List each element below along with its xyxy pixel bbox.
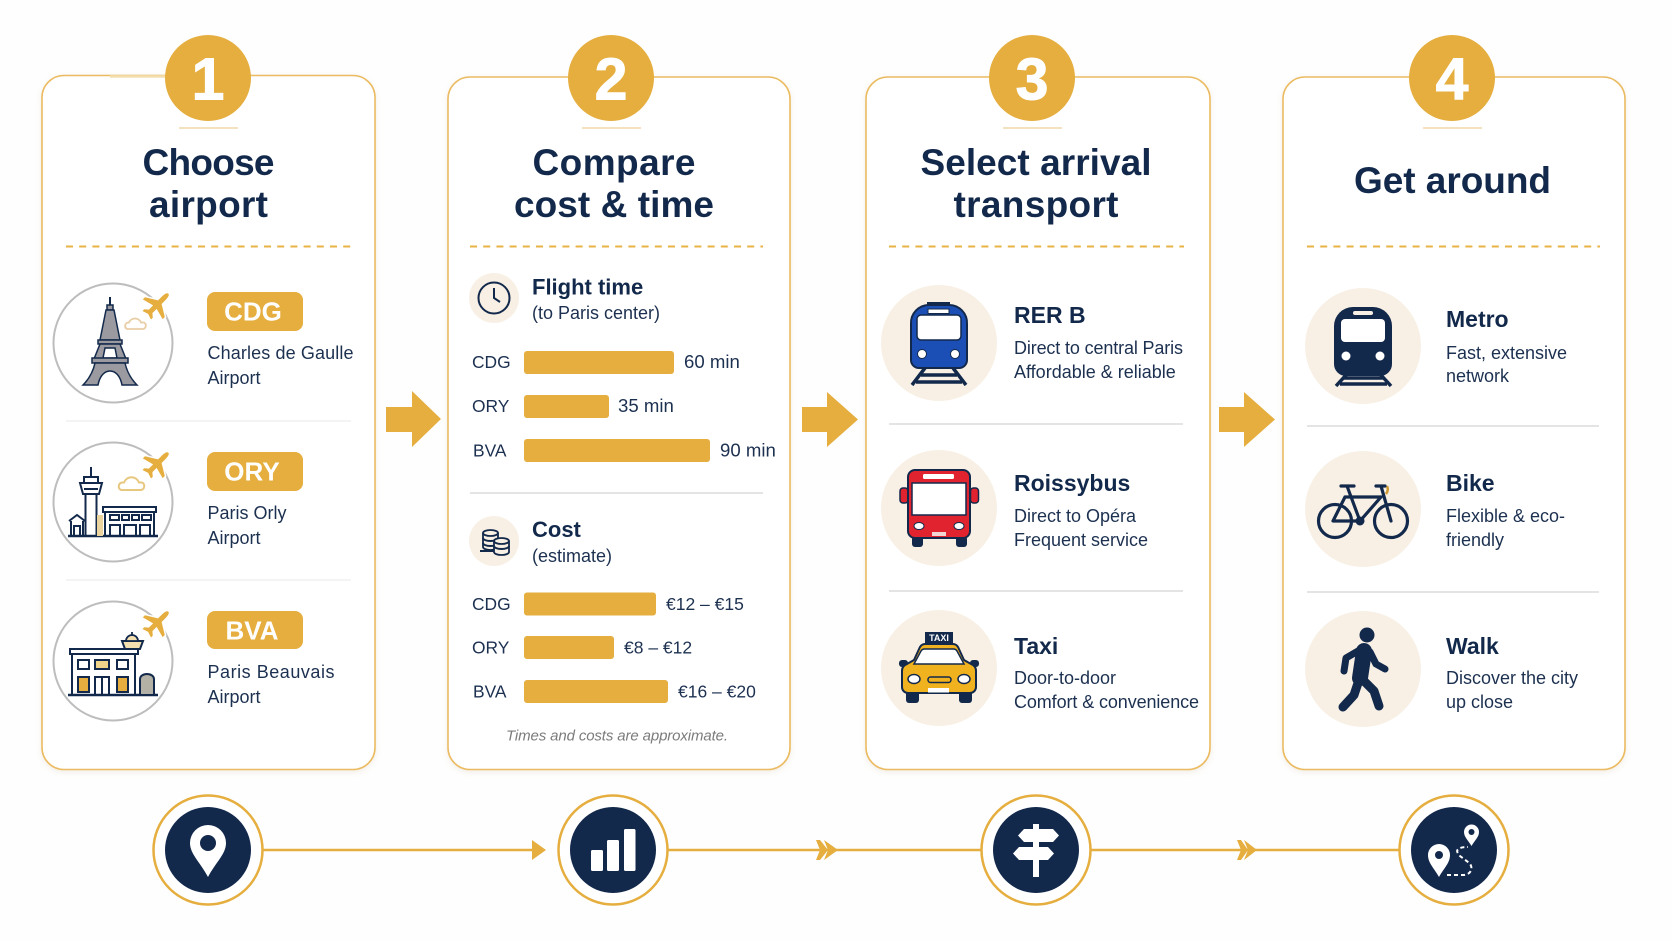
bar chart: cost: €8 – €12 [624,638,692,658]
icon: eiffel tower with plane [54,284,178,402]
arrow: step 1 to 2 [386,391,441,447]
text: walk: Walk [1446,633,1499,659]
icon: metro [1305,288,1421,404]
text: taxi: Taxi [1014,633,1058,659]
bar chart: flight time: ORY [472,396,510,416]
bar chart: cost: CDG [472,594,511,614]
bar chart: cost: €12 – €15 [666,594,744,614]
step number 3 [989,35,1075,121]
heading: select arrival transport: transport [954,184,1118,225]
step number 1: 1 [192,46,224,112]
bar chart: flight time: 90 min [720,440,776,460]
bar chart: cost: BVA [473,682,507,702]
step number 1 [165,35,251,121]
text: metro: Metro [1446,306,1509,332]
text: RER B: Affordable & reliable [1014,362,1176,382]
timeline connector 3 to 4 [1091,840,1399,860]
icon: beauvais terminal with plane [54,602,178,720]
bar chart: flight time: 35 min [618,395,674,416]
airport badge: ORY [207,452,303,491]
airport badge: BVA: BVA [226,616,279,646]
timeline icon: map pin [154,796,262,904]
footnote: Times and costs are approximate. [506,728,728,744]
text: bike: Flexible & eco- [1446,506,1565,526]
airport name: Paris Beauvais: Paris Beauvais [208,662,334,682]
bar chart: flight time [472,351,776,462]
airport name: Paris Orly: Paris Orly [208,503,287,523]
heading: compare cost and time: cost & time [514,184,714,225]
airport badge: CDG [207,292,303,331]
text: bike: friendly [1446,530,1504,550]
timeline icon: signpost [982,796,1090,904]
subheading: cost: (estimate) [532,546,612,566]
airport name: Charles de Gaulle: Airport [208,368,261,388]
heading: compare cost and time: Compare [532,142,696,183]
timeline icon: bar chart [558,796,668,904]
heading: choose airport: airport [149,184,268,225]
arrow: step 2 to 3 [802,392,858,447]
icon: coin stacks [469,516,519,566]
airport badge: ORY: ORY [224,456,280,486]
panel: step 4 get around [1283,35,1625,770]
bar chart: flight time: BVA [473,440,507,460]
text: Roissybus: Direct to Opéra [1014,506,1137,526]
step number 2 [568,35,654,121]
airport name: Paris Beauvais: Airport [208,687,261,707]
icon: taxi [881,610,997,726]
icon: bike [1305,451,1421,567]
icon: orly tower and terminal with plane [54,442,178,562]
airport name: Paris Orly: Airport [208,528,261,548]
text: RER B: Direct to central Paris [1014,338,1183,358]
heading: select arrival transport: Select arrival [920,142,1152,183]
bar chart: cost: ORY [472,638,510,658]
subheading: flight time: (to Paris center) [532,303,660,323]
text: metro: network [1446,366,1510,386]
icon: clock [469,273,519,323]
text: Roissybus: Roissybus [1014,470,1130,496]
heading: choose airport: Choose [142,142,274,183]
bar chart: flight time: 60 min [684,351,740,372]
bar chart: cost [472,592,756,703]
timeline connector 2 to 3 [668,840,981,860]
panel: step 2 compare cost and time [448,35,790,770]
text: walk: up close [1446,692,1513,712]
icon: RER B train [881,285,997,401]
text: RER B: RER B [1014,302,1086,328]
step number 4: 4 [1436,46,1469,112]
icon: Roissybus [881,450,997,566]
panel: step 3 select arrival transport [866,35,1210,770]
subheading: flight time: Flight time [532,274,643,300]
text: Roissybus: Frequent service [1014,530,1148,550]
timeline icon: route with pins [1400,796,1508,904]
airport name: Charles de Gaulle: Charles de Gaulle [208,343,354,363]
icon: walking person [1305,611,1421,727]
heading: get around: Get around [1354,160,1551,201]
step number 4 [1409,35,1495,121]
subheading: cost: Cost [532,517,582,542]
text: walk: Discover the city [1446,668,1578,688]
text: taxi: Comfort & convenience [1014,692,1199,712]
bar chart: flight time: CDG [472,352,511,372]
icon: taxi: TAXI [929,633,949,643]
step number 2: 2 [595,46,627,112]
panel: step 1 choose airport [42,35,375,770]
timeline connector 1 to 2 [263,840,546,860]
arrow: step 3 to 4 [1219,392,1275,447]
text: taxi: Door-to-door [1014,668,1116,688]
airport badge: BVA [207,611,303,649]
bar chart: cost: €16 – €20 [678,682,756,702]
text: metro: Fast, extensive [1446,343,1567,363]
text: bike: Bike [1446,470,1495,496]
step number 3: 3 [1016,46,1048,112]
airport badge: CDG: CDG [224,296,282,326]
